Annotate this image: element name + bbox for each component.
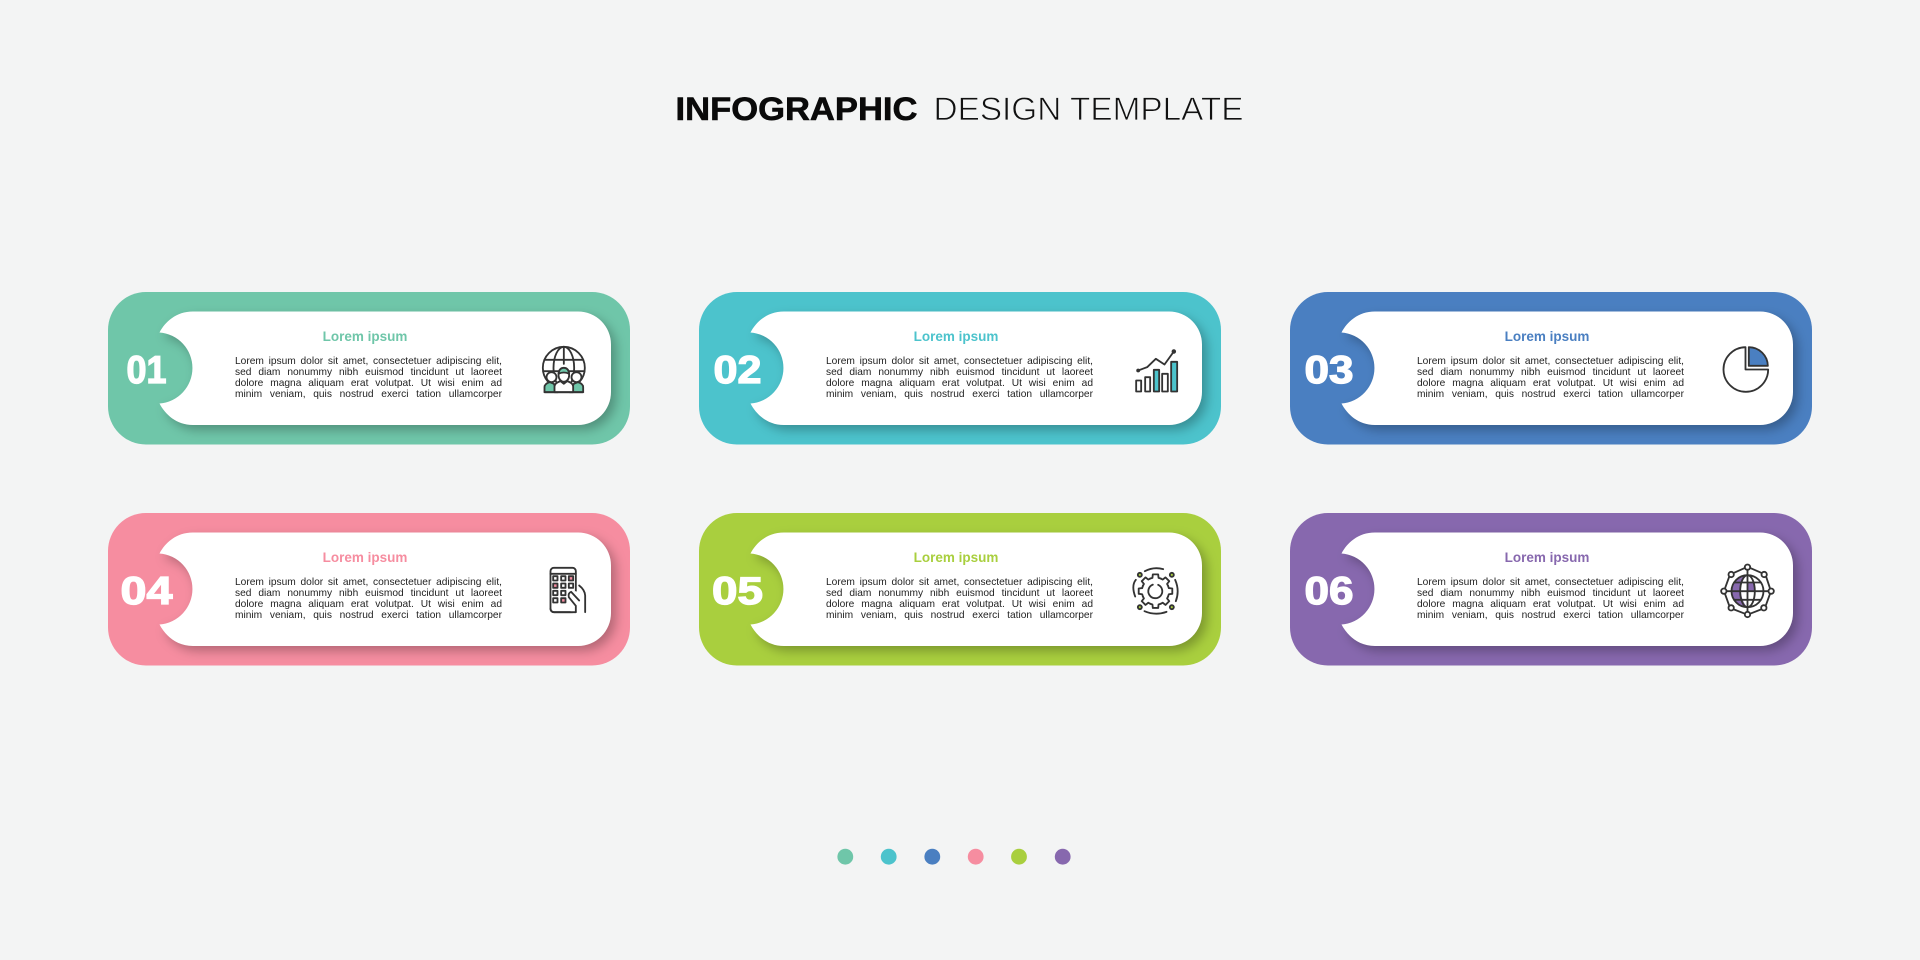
panel: step 06: dolore magna aliquam erat volutpat. Ut wisi enim ad [1417,599,1684,610]
panel: step 01: 01 [126,348,166,392]
panel: step 02: sed diam nonummy nibh euismod tincidunt ut laoreet [826,367,1093,378]
panel: step 04: 04 [120,570,172,612]
panel: step 03 [1290,292,1812,444]
panel: step 06 [1290,513,1812,666]
panel: step 04: Lorem ipsum [323,550,407,565]
panel: step 04: sed diam nonummy nibh euismod tincidunt ut laoreet [235,588,502,599]
panel: step 03: minim veniam, quis nostrud exerci tation ullamcorper [1417,389,1684,400]
title: INFOGRAPHIC [676,91,918,127]
panel: step 01 [108,292,630,444]
panel: step 02: dolore magna aliquam erat volutpat. Ut wisi enim ad [826,378,1093,389]
panel: step 05: sed diam nonummy nibh euismod tincidunt ut laoreet [826,588,1093,599]
legend dots [837,848,1071,865]
panel: step 04: Lorem ipsum dolor sit amet, consectetuer adipiscing elit, [235,577,502,588]
title: DESIGN TEMPLATE [934,91,1244,127]
panel: step 03: 03 [1304,348,1353,392]
panel: step 06: minim veniam, quis nostrud exerci tation ullamcorper [1417,610,1684,621]
panel: step 01: sed diam nonummy nibh euismod tincidunt ut laoreet [235,367,502,378]
panel: step 02: Lorem ipsum [914,329,998,344]
panel: step 05: dolore magna aliquam erat volutpat. Ut wisi enim ad [826,599,1093,610]
panel: step 02: Lorem ipsum dolor sit amet, consectetuer adipiscing elit, [826,356,1093,367]
panel: step 02: 02 [713,348,761,392]
panel: step 06: Lorem ipsum [1505,550,1589,565]
panel: step 05: 05 [712,570,762,612]
panel: step 05: Lorem ipsum [914,550,998,565]
panel: step 04 [108,513,630,666]
panel: step 05: Lorem ipsum dolor sit amet, consectetuer adipiscing elit, [826,577,1093,588]
panel: step 03: dolore magna aliquam erat volutpat. Ut wisi enim ad [1417,378,1684,389]
panel: step 06: Lorem ipsum dolor sit amet, consectetuer adipiscing elit, [1417,577,1684,588]
panel: step 01: dolore magna aliquam erat volutpat. Ut wisi enim ad [235,378,502,389]
panel: step 04: minim veniam, quis nostrud exerci tation ullamcorper [235,610,502,621]
panel: step 02 [699,292,1221,444]
panel: step 05 [699,513,1221,666]
panel: step 03: Lorem ipsum dolor sit amet, consectetuer adipiscing elit, [1417,356,1684,367]
panel: step 02: minim veniam, quis nostrud exerci tation ullamcorper [826,389,1093,400]
panel: step 01: minim veniam, quis nostrud exerci tation ullamcorper [235,389,502,400]
panel: step 01: Lorem ipsum dolor sit amet, consectetuer adipiscing elit, [235,356,502,367]
panel: step 05: minim veniam, quis nostrud exerci tation ullamcorper [826,610,1093,621]
panel: step 03: Lorem ipsum [1505,329,1589,344]
panel: step 06: sed diam nonummy nibh euismod tincidunt ut laoreet [1417,588,1684,599]
panel: step 03: sed diam nonummy nibh euismod tincidunt ut laoreet [1417,367,1684,378]
panel: step 04: dolore magna aliquam erat volutpat. Ut wisi enim ad [235,599,502,610]
title [676,91,1244,127]
panel: step 06: 06 [1304,570,1353,612]
panel: step 01: Lorem ipsum [323,329,407,344]
